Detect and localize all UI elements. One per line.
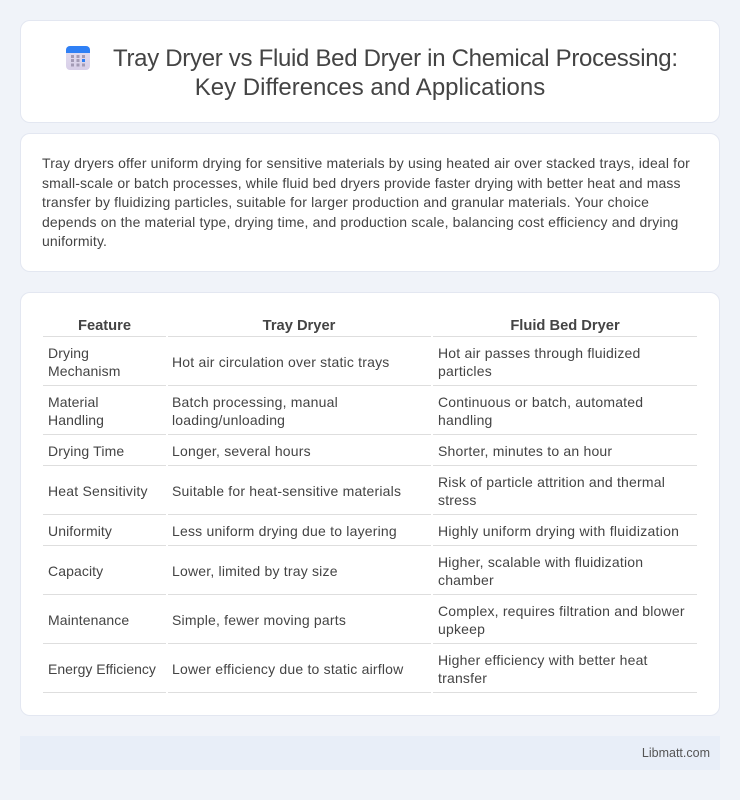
row: drying mechanism: Drying: [48, 345, 89, 361]
table header: Feature: [78, 318, 131, 334]
row: drying time: Drying Time: [48, 443, 124, 459]
row: maintenance: Maintenance: [48, 612, 129, 628]
table header: Fluid Bed Dryer: [510, 318, 620, 334]
row: drying mechanism: Hot air passes through fluidized: [438, 345, 641, 361]
row: maintenance: [48, 603, 685, 637]
row: material handling: Handling: [48, 412, 104, 428]
row: material handling: Batch processing, manual: [172, 394, 338, 410]
row: maintenance: Complex, requires filtration and blower: [438, 603, 685, 619]
row: drying mechanism: Mechanism: [48, 363, 120, 379]
row: uniformity: Highly uniform drying with fluidization: [438, 523, 679, 539]
row: material handling: loading/unloading: [172, 412, 285, 428]
panel: summary: [20, 133, 720, 272]
row: capacity: [48, 554, 643, 588]
row: energy efficiency: transfer: [438, 670, 487, 686]
row: maintenance: upkeep: [438, 621, 485, 637]
footer credit: Libmatt.com: [642, 746, 710, 760]
table header: [78, 318, 620, 334]
title: [113, 45, 678, 101]
row: heat sensitivity: [48, 474, 665, 508]
row: drying time: Shorter, minutes to an hour: [438, 443, 612, 459]
summary text: transfer by fluidizing particles, suitable for larger production and granular materials. Your choice: [42, 194, 649, 210]
summary text: uniformity.: [42, 233, 107, 249]
row: capacity: chamber: [438, 572, 494, 588]
row: drying mechanism: particles: [438, 363, 492, 379]
row: energy efficiency: [48, 652, 648, 686]
row: drying mechanism: Hot air circulation over static trays: [172, 354, 389, 370]
table header: Tray Dryer: [263, 318, 335, 334]
summary text: Tray dryers offer uniform drying for sensitive materials by using heated air over stacked trays, ideal for: [42, 155, 690, 171]
row: energy efficiency: Higher efficiency with better heat: [438, 652, 648, 668]
row: material handling: Material: [48, 394, 99, 410]
row: material handling: Continuous or batch, automated: [438, 394, 643, 410]
icon: calendar: [66, 46, 90, 70]
row: energy efficiency: Energy Efficiency: [48, 661, 156, 677]
row: heat sensitivity: Heat Sensitivity: [48, 483, 148, 499]
row: heat sensitivity: Risk of particle attrition and thermal: [438, 474, 665, 490]
row: energy efficiency: Lower efficiency due to static airflow: [172, 661, 403, 677]
title: Tray Dryer vs Fluid Bed Dryer in Chemical Processing:: [113, 45, 678, 72]
row: capacity: Capacity: [48, 563, 103, 579]
summary text: small-scale or batch processes, while fluid bed dryers provide faster drying with better heat and mass: [42, 174, 681, 190]
title: Key Differences and Applications: [195, 74, 545, 101]
panel: title card: [20, 20, 720, 123]
row: capacity: Higher, scalable with fluidization: [438, 554, 643, 570]
row: uniformity: Uniformity: [48, 523, 112, 539]
row: drying mechanism: [48, 345, 641, 379]
row: capacity: Lower, limited by tray size: [172, 563, 338, 579]
row: material handling: [48, 394, 643, 428]
row: material handling: handling: [438, 412, 493, 428]
row: heat sensitivity: stress: [438, 492, 477, 508]
row: drying time: Longer, several hours: [172, 443, 311, 459]
row: uniformity: Less uniform drying due to layering: [172, 523, 397, 539]
row: uniformity: [48, 523, 679, 539]
row: drying time: [48, 443, 612, 459]
summary text: depends on the material type, drying time, and production scale, balancing cost efficiency and drying: [42, 214, 678, 230]
row: heat sensitivity: Suitable for heat-sensitive materials: [172, 483, 401, 499]
summary text: [42, 155, 690, 249]
footer: [20, 736, 720, 770]
row: maintenance: Simple, fewer moving parts: [172, 612, 346, 628]
panel: comparison table: [20, 292, 720, 716]
